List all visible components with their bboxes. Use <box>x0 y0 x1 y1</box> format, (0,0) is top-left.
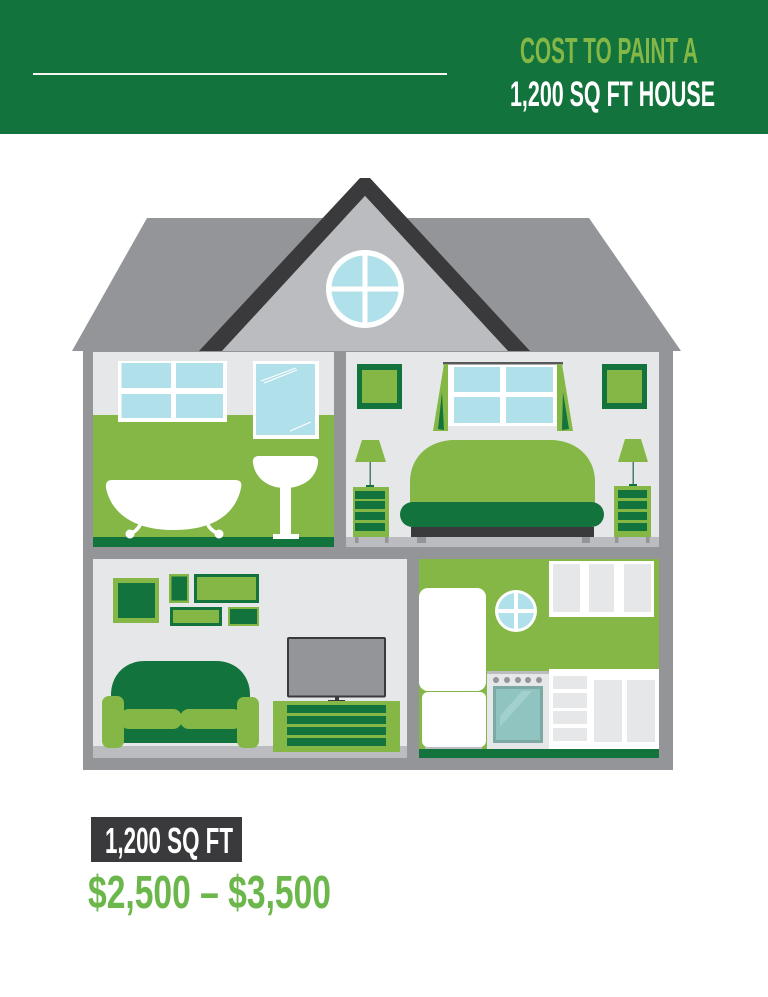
size label: 1,200 SQ FT <box>105 820 233 861</box>
room: living room <box>93 559 407 758</box>
bedroom picture left <box>357 364 402 409</box>
bed <box>400 440 604 543</box>
tv cabinet <box>273 701 400 752</box>
room: bedroom <box>346 352 659 547</box>
refrigerator <box>419 588 486 749</box>
pedestal sink <box>253 456 318 539</box>
room: bathroom <box>93 352 334 547</box>
bathroom mirror <box>253 361 319 439</box>
main roof <box>72 218 681 351</box>
bedroom picture right <box>602 364 647 409</box>
size label <box>91 817 242 862</box>
sofa <box>102 661 259 748</box>
header banner <box>0 0 768 134</box>
room: kitchen <box>419 559 659 758</box>
kitchen round window <box>495 590 537 632</box>
left nightstand <box>353 487 389 543</box>
upper cabinets <box>549 561 654 617</box>
price range: $2,500 – $3,500 <box>88 866 331 918</box>
bathtub <box>106 480 241 538</box>
stove <box>487 671 549 749</box>
gallery wall pictures <box>113 574 259 626</box>
right nightstand <box>614 486 651 543</box>
bedroom window with curtains <box>433 362 573 431</box>
gable face <box>222 196 508 351</box>
television <box>288 638 385 702</box>
gable trim <box>199 178 530 351</box>
attic round window <box>326 250 404 328</box>
lower cabinets <box>549 669 659 749</box>
bathroom window <box>118 361 227 422</box>
house body walls <box>83 351 673 770</box>
house illustration <box>72 178 681 918</box>
right lamp <box>618 439 648 486</box>
left lamp <box>355 440 386 487</box>
